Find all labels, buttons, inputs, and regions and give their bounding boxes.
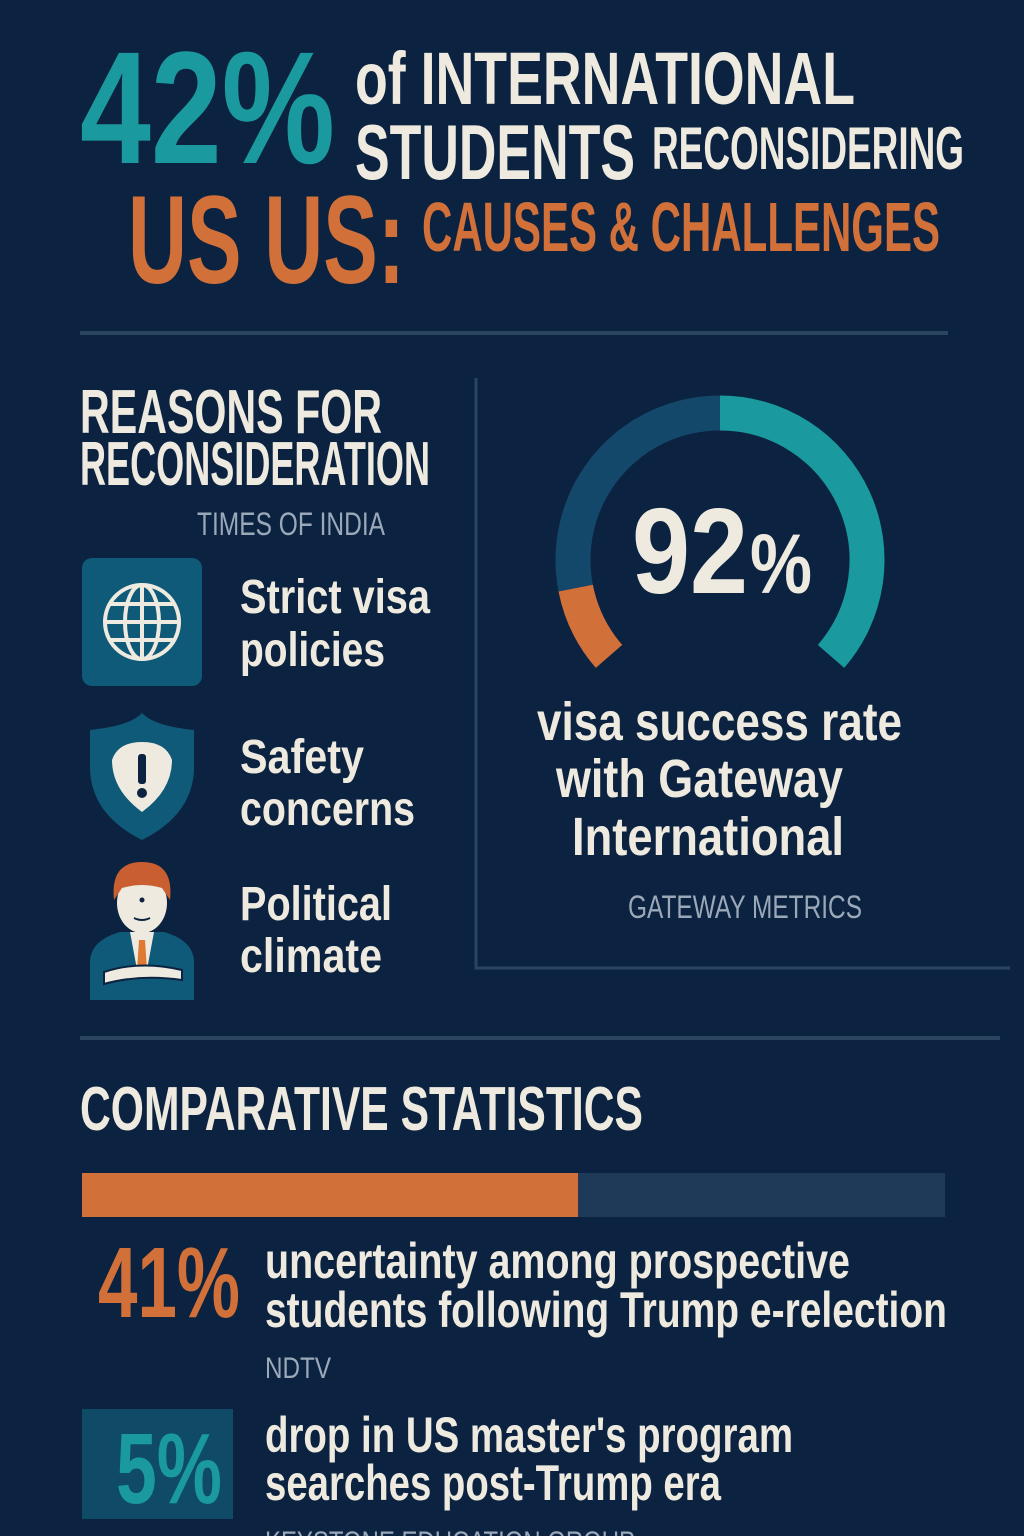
text: safety concerns — [240, 731, 415, 836]
heading: reasons: REASONS FOR — [80, 378, 382, 447]
stat box: 5%: 5% — [116, 1413, 222, 1525]
text: uncertainty: uncertainty among prospective — [265, 1233, 850, 1289]
icon: globe — [82, 558, 202, 686]
stat: 92%: 92 — [632, 483, 748, 619]
text: political climate: Political — [240, 878, 392, 931]
text: visa success rate: International — [572, 807, 844, 867]
icon: politician — [90, 862, 194, 1000]
donut chart — [573, 413, 867, 656]
text: political climate: climate — [240, 930, 382, 983]
text: political climate — [240, 878, 392, 983]
text: visa success rate: with Gateway — [555, 749, 843, 809]
panel: visa success — [476, 378, 1010, 968]
title: US US: — [128, 171, 405, 310]
stat: 41%: 41% — [98, 1227, 240, 1339]
panel: reasons — [80, 378, 430, 1000]
heading: reasons — [80, 378, 430, 499]
panel: comparative statistics — [80, 1075, 947, 1536]
title — [80, 18, 964, 310]
heading: comparative statistics: COMPARATIVE STATISTICS — [80, 1075, 643, 1144]
text: strict visa policies: policies — [240, 624, 385, 677]
text: strict visa policies: Strict visa — [240, 571, 430, 624]
heading: reasons: RECONSIDERATION — [80, 430, 430, 499]
stat box: 5% — [82, 1409, 233, 1525]
title: STUDENTS — [355, 108, 635, 196]
text: drop in searches — [265, 1407, 793, 1511]
text: drop in searches: drop in US master's program — [265, 1407, 793, 1463]
title: of INTERNATIONAL — [355, 37, 855, 120]
text: safety concerns: Safety — [240, 731, 364, 784]
source: times of india: TIMES OF INDIA — [197, 506, 386, 542]
title: 42% — [80, 18, 335, 197]
text: safety concerns: concerns — [240, 783, 415, 836]
source: ndtv: NDTV — [265, 1352, 331, 1385]
text: drop in searches: searches post-Trump era — [265, 1455, 722, 1511]
text: visa success rate — [537, 692, 902, 867]
text: uncertainty — [265, 1233, 947, 1338]
text: visa success rate: visa success rate — [537, 692, 902, 752]
bar chart — [82, 1173, 945, 1217]
stat: 92%: % — [750, 517, 812, 611]
text: strict visa policies — [240, 571, 430, 677]
source: gateway metrics: GATEWAY METRICS — [628, 889, 862, 925]
icon: shield — [90, 713, 194, 840]
